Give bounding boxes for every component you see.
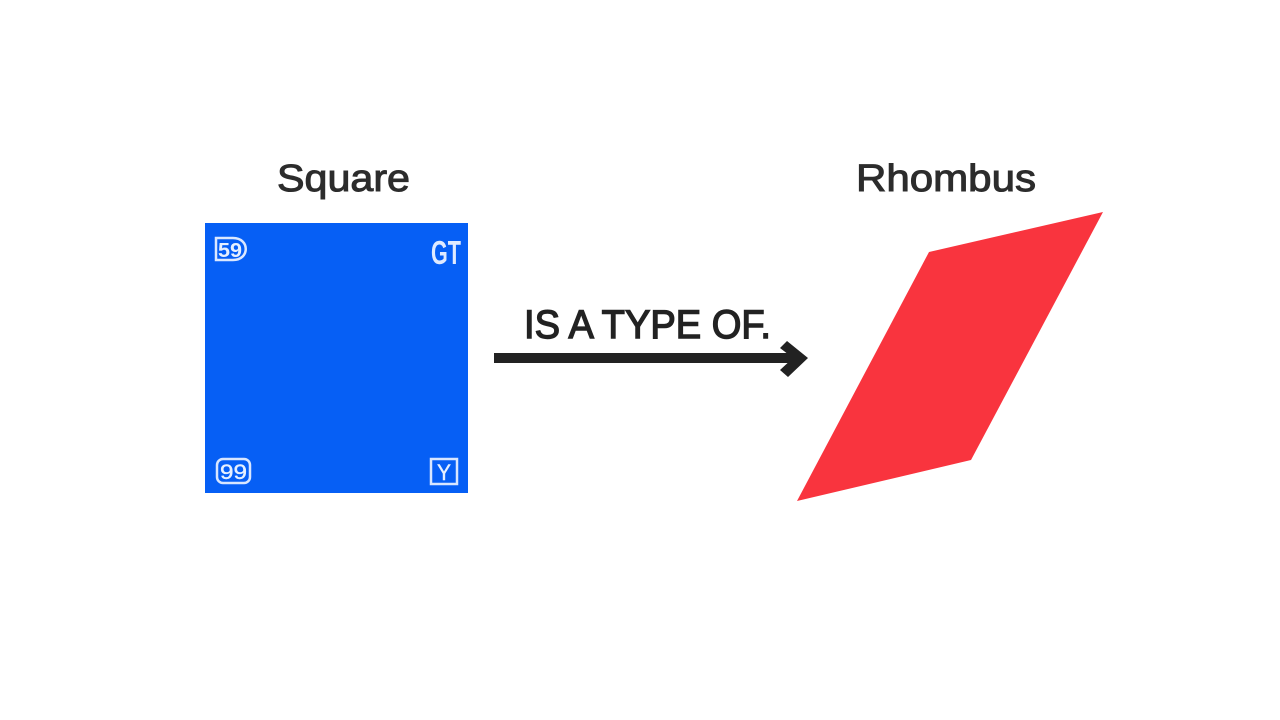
- heading: Rhombus: Rhombus: [856, 158, 1036, 200]
- arrow: [494, 341, 808, 377]
- connector label: IS A TYPE OF.: [524, 303, 771, 347]
- corner mark: bottom right: [431, 459, 457, 485]
- heading: Square: Square: [277, 158, 410, 200]
- corner mark: bottom left: 99: [220, 461, 247, 484]
- blue square with corner marks: [205, 223, 468, 493]
- corner mark: top left: 59: [218, 240, 242, 262]
- corner mark: top left: [216, 238, 246, 262]
- red rhombus: [797, 212, 1103, 501]
- corner mark: bottom left: [217, 459, 250, 484]
- corner mark: bottom right: Y: [437, 460, 451, 485]
- corner mark: top right: GT: [431, 234, 461, 271]
